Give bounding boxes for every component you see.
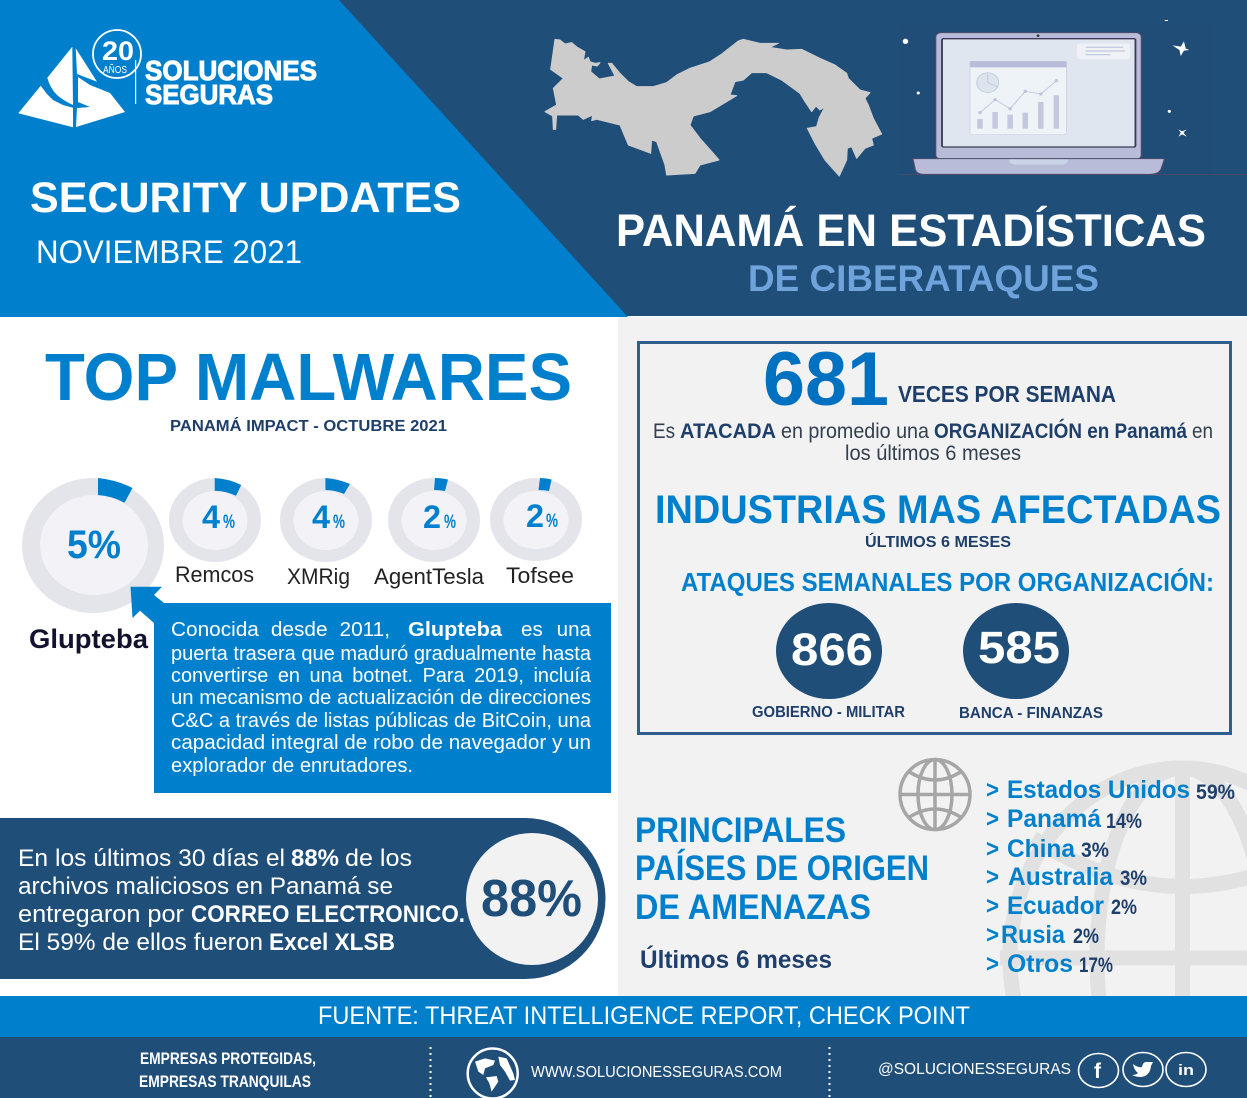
callout: Glupteba description: un mecanismo de actualización de direcciones bbox=[171, 687, 591, 709]
donut: Glupteba 5% bbox=[22, 478, 164, 613]
panel: 88% malicious files: 88% bbox=[291, 845, 339, 872]
website: WWW.SOLUCIONESSEGURAS.COM bbox=[531, 1064, 782, 1081]
list: countries of origin: > bbox=[986, 805, 999, 833]
heading: threat origin countries: PRINCIPALES bbox=[635, 811, 846, 850]
callout: Glupteba description: explorador de enrutadores. bbox=[171, 755, 413, 777]
donut: Remcos 4%: 4 bbox=[202, 499, 220, 535]
icon: facebook bbox=[1078, 1054, 1118, 1088]
text: organization attacked: Es bbox=[653, 420, 675, 443]
headline: Panamá en estadísticas: PANAMÁ EN ESTADÍSTICAS bbox=[616, 205, 1206, 256]
text: organization attacked: ORGANIZACIÓN en Panamá bbox=[934, 419, 1187, 443]
icon: world bbox=[468, 1048, 518, 1098]
list: countries of origin: 17% bbox=[1079, 954, 1113, 977]
subheading: last 6 months: ÚLTIMOS 6 MESES bbox=[865, 532, 1011, 551]
laptop illustration bbox=[900, 20, 1247, 175]
text: organization attacked: en bbox=[1192, 420, 1213, 443]
panel: 88% malicious files bbox=[0, 818, 606, 979]
stat: banking and finance bbox=[959, 603, 1103, 722]
list: countries of origin: Australia bbox=[1008, 863, 1114, 891]
source bar: FUENTE: THREAT INTELLIGENCE REPORT, CHECK POINT bbox=[318, 1002, 970, 1030]
callout: Glupteba description bbox=[130, 587, 611, 793]
subtitle: date: NOVIEMBRE 2021 bbox=[36, 234, 302, 270]
donut: AgentTesla 2% bbox=[388, 478, 480, 562]
icon: globe bbox=[900, 760, 970, 830]
icon: twitter bbox=[1123, 1052, 1163, 1086]
donut: XMRig 4%: % bbox=[333, 512, 345, 533]
heading: threat origin countries: PAÍSES DE ORIGEN bbox=[635, 848, 929, 888]
text: organization attacked: en promedio una bbox=[781, 420, 929, 443]
panel: 88% malicious files: El 59% de ellos fueron bbox=[18, 929, 263, 956]
stat: government and military: GOBIERNO - MILITAR bbox=[752, 704, 905, 721]
list: countries of origin: 3% bbox=[1120, 867, 1147, 890]
list: countries of origin: 59% bbox=[1196, 781, 1235, 804]
stat: 681 per week: 681 bbox=[763, 337, 889, 422]
list: countries of origin bbox=[986, 776, 1235, 978]
list: countries of origin: Estados Unidos bbox=[1007, 776, 1190, 804]
slogan: EMPRESAS TRANQUILAS bbox=[139, 1072, 311, 1091]
icon: linkedin bbox=[1166, 1052, 1206, 1086]
icon: facebook: f bbox=[1094, 1060, 1102, 1083]
list: countries of origin: 3% bbox=[1081, 839, 1109, 862]
list: countries of origin: > bbox=[986, 835, 999, 863]
subheading: Panamá impact: PANAMÁ IMPACT - OCTUBRE 2021 bbox=[170, 416, 447, 435]
stat: banking and finance: BANCA - FINANZAS bbox=[959, 705, 1103, 722]
slogan bbox=[139, 1049, 316, 1091]
heading: weekly attacks by organization: ATAQUES SEMANALES POR ORGANIZACIÓN: bbox=[681, 567, 1214, 597]
donut: Remcos 4% bbox=[169, 478, 261, 562]
callout: Glupteba description: es una bbox=[521, 619, 592, 641]
logo: Soluciones Seguras: SOLUCIONES bbox=[145, 55, 317, 86]
logo: Soluciones Seguras bbox=[18, 30, 317, 127]
donut: Tofsee 2%: 2 bbox=[526, 498, 544, 534]
source bar bbox=[0, 996, 1247, 1037]
donut: AgentTesla 2%: % bbox=[444, 512, 456, 533]
list: countries of origin: China bbox=[1007, 835, 1076, 863]
panel: weekly attacks box bbox=[638, 337, 1230, 734]
list: countries of origin: > bbox=[986, 950, 999, 978]
title: Security Updates: SECURITY UPDATES bbox=[30, 174, 461, 222]
list: countries of origin: Panamá bbox=[1007, 805, 1101, 833]
text: organization attacked bbox=[653, 419, 1213, 465]
callout: Glupteba description: C&C a través de listas públicas de BitCoin, una bbox=[171, 710, 592, 732]
donut: XMRig 4% bbox=[280, 478, 372, 562]
donut: XMRig 4%: 4 bbox=[312, 499, 330, 535]
label: Tofsee: Tofsee bbox=[506, 563, 574, 588]
heading: threat origin countries: DE AMENAZAS bbox=[635, 888, 871, 927]
stat: government and military: 866 bbox=[791, 624, 873, 675]
social handle: @SOLUCIONESSEGURAS bbox=[878, 1061, 1071, 1078]
heading: industries: INDUSTRIAS MAS AFECTADAS bbox=[655, 488, 1221, 532]
icon: linkedin: in bbox=[1178, 1062, 1194, 1079]
stat: 681 per week: VECES POR SEMANA bbox=[898, 381, 1116, 407]
panel: 88% malicious files: archivos maliciosos en Panamá se bbox=[18, 873, 393, 900]
list: countries of origin: > bbox=[986, 776, 999, 804]
list: countries of origin: 2% bbox=[1073, 925, 1099, 948]
label: Remcos: Remcos bbox=[175, 562, 254, 587]
text: last 6 months: Últimos 6 meses bbox=[640, 944, 832, 974]
list: countries of origin: Otros bbox=[1007, 950, 1073, 978]
stat: government and military bbox=[752, 603, 905, 721]
panel: 88% malicious files: entregaron por bbox=[18, 901, 184, 928]
list: countries of origin: 2% bbox=[1111, 896, 1137, 919]
slogan: EMPRESAS PROTEGIDAS, bbox=[140, 1049, 316, 1068]
callout: Glupteba description: Glupteba bbox=[408, 619, 503, 641]
label: XMRig: XMRig bbox=[287, 564, 350, 589]
callout: Glupteba description: convertirse en una botnet. Para 2019, incluía bbox=[171, 665, 592, 687]
logo: Soluciones Seguras: SEGURAS bbox=[145, 79, 273, 110]
header panel bbox=[0, 0, 1247, 317]
text: organization attacked: ATACADA bbox=[680, 420, 776, 443]
list: countries of origin: Ecuador bbox=[1007, 892, 1104, 920]
callout: Glupteba description: puerta trasera que maduró gradualmente hasta bbox=[171, 643, 592, 665]
donut: Glupteba 5%: 5% bbox=[67, 523, 121, 567]
logo: Soluciones Seguras: 20 bbox=[102, 36, 134, 66]
panel: 88% malicious files: 88% bbox=[481, 870, 582, 928]
callout: Glupteba description: Conocida desde 2011, bbox=[171, 619, 390, 641]
panel: 88% malicious files: de los bbox=[345, 845, 412, 872]
panel: 88% malicious files: CORREO ELECTRONICO. bbox=[191, 901, 465, 928]
donut: AgentTesla 2%: 2 bbox=[423, 499, 441, 535]
list: countries of origin: > bbox=[986, 863, 999, 891]
list: countries of origin: Rusia bbox=[1001, 921, 1066, 949]
donut: Remcos 4%: % bbox=[223, 512, 235, 533]
text: organization attacked: los últimos 6 meses bbox=[845, 442, 1021, 465]
panel: 88% malicious files: En los últimos 30 días el bbox=[18, 845, 285, 872]
panel: right background bbox=[618, 317, 1247, 996]
heading: Top Malwares: TOP MALWARES bbox=[45, 340, 572, 415]
stat: 681 per week bbox=[763, 337, 1116, 422]
headline: de ciberataques: DE CIBERATAQUES bbox=[748, 258, 1099, 299]
callout: Glupteba description: capacidad integral de robo de navegador y un bbox=[171, 732, 591, 754]
panel: 88% malicious files: Excel XLSB bbox=[269, 929, 395, 956]
footer bar bbox=[0, 1037, 1247, 1098]
logo: Soluciones Seguras: AÑOS bbox=[103, 63, 127, 76]
map of Panama bbox=[545, 39, 882, 176]
label: AgentTesla: AgentTesla bbox=[374, 564, 485, 589]
list: countries of origin: > bbox=[986, 921, 999, 949]
stat: banking and finance: 585 bbox=[978, 622, 1060, 673]
label: Glupteba: Glupteba bbox=[29, 624, 149, 654]
donut: Tofsee 2% bbox=[490, 478, 582, 561]
heading: threat origin countries bbox=[635, 811, 929, 927]
list: countries of origin: 14% bbox=[1106, 810, 1142, 833]
list: countries of origin: > bbox=[986, 892, 999, 920]
donut: Tofsee 2%: % bbox=[546, 511, 558, 532]
